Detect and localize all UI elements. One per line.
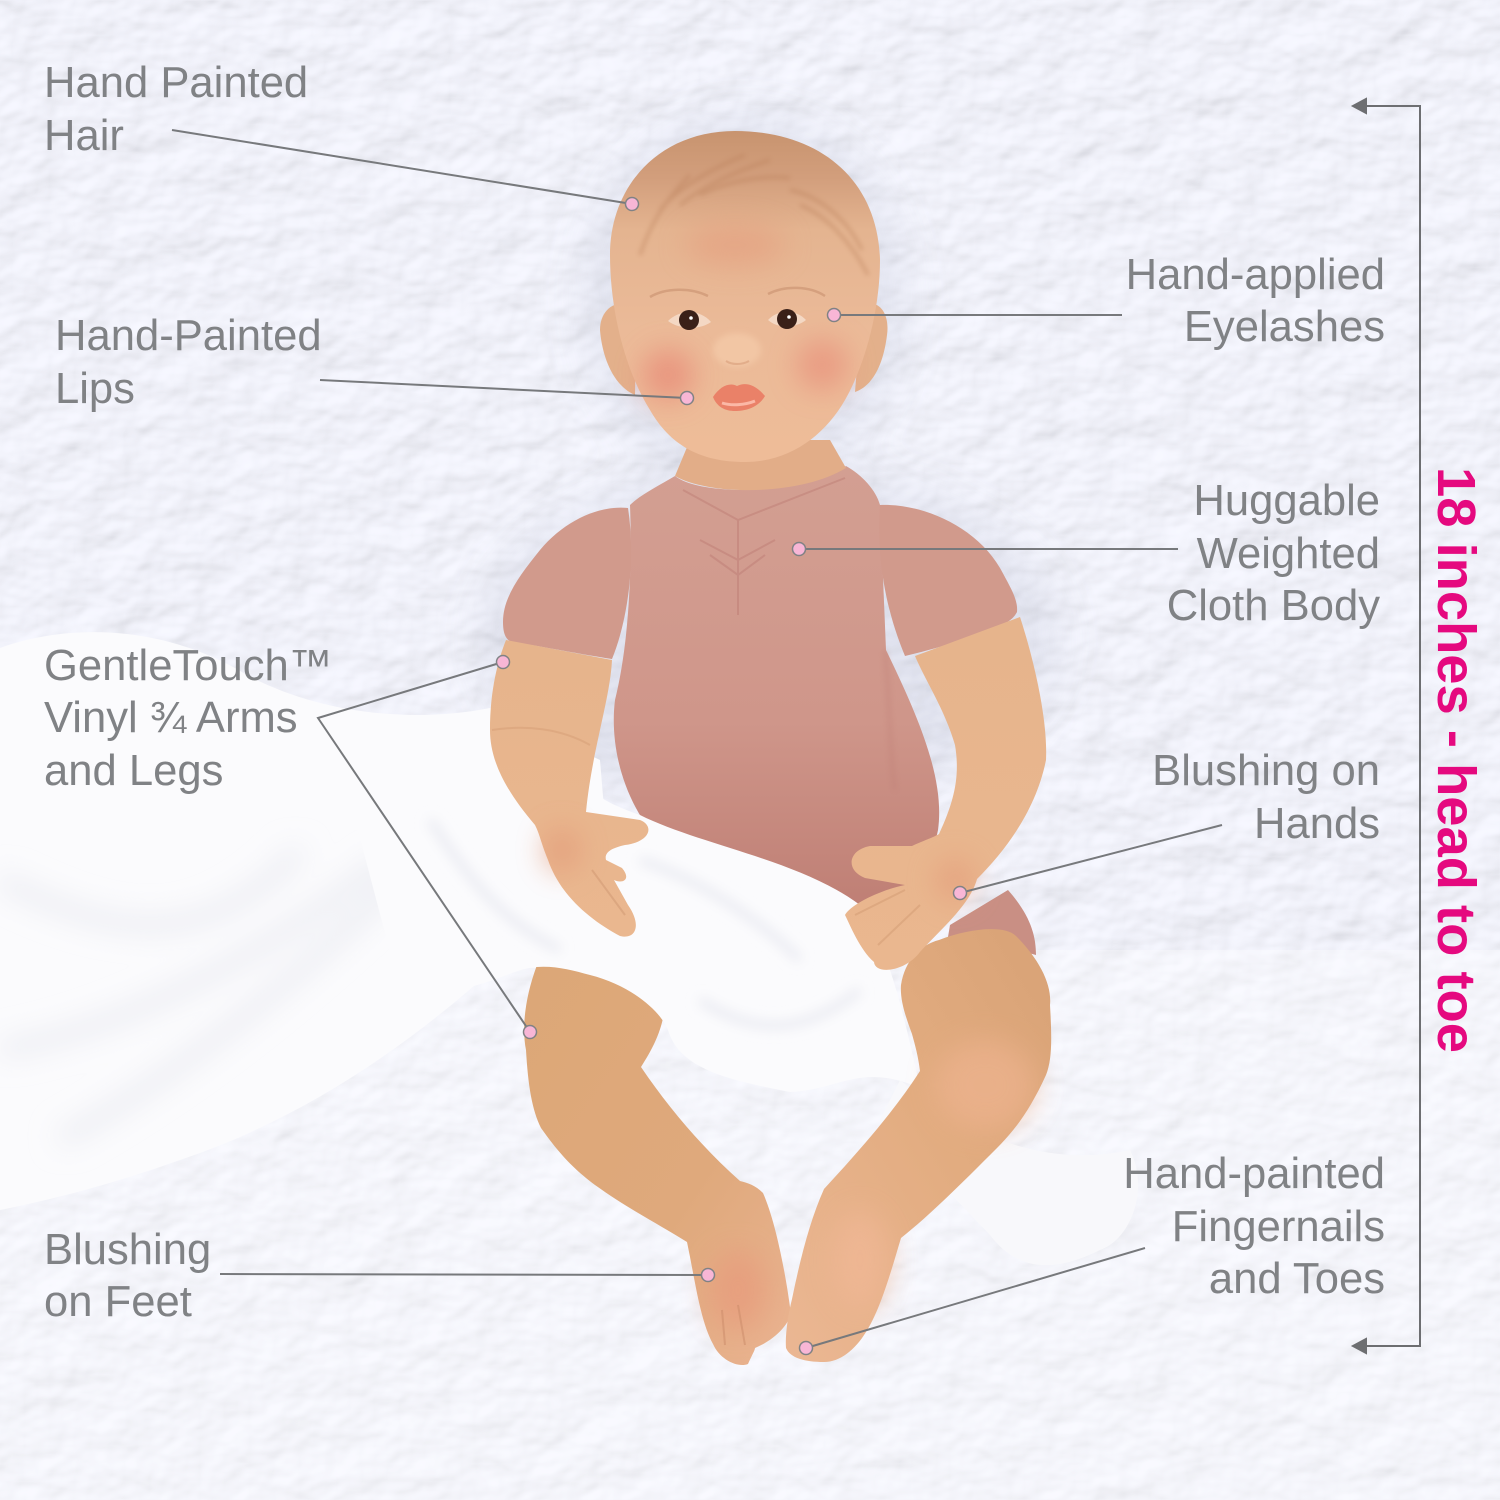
callout: gentletouch vinyl arms and legs bbox=[44, 642, 536, 1038]
callout: hand painted hair bbox=[44, 59, 638, 210]
callout: huggable weighted cloth body: Cloth Body bbox=[1167, 582, 1380, 630]
lips bbox=[713, 384, 765, 411]
hair strokes bbox=[640, 155, 868, 275]
callout: hand-painted fingernails and toes bbox=[800, 1150, 1385, 1354]
eyes bbox=[668, 309, 806, 330]
right leg bbox=[786, 929, 1051, 1362]
eyebrows bbox=[650, 288, 825, 297]
right arm and hand bbox=[845, 617, 1046, 970]
callout: hand-applied eyelashes: Hand-applied bbox=[1126, 251, 1385, 299]
callout: gentletouch vinyl arms and legs: and Legs bbox=[44, 747, 223, 795]
callout: hand-applied eyelashes: Eyelashes bbox=[1184, 303, 1385, 351]
callout: blushing on hands: Blushing on bbox=[1152, 747, 1380, 795]
callout: hand-painted lips: Hand-Painted bbox=[55, 312, 322, 360]
callout: blushing on feet bbox=[44, 1226, 714, 1326]
soft shadow around doll bbox=[480, 115, 1060, 810]
left arm and hand bbox=[490, 640, 648, 937]
white gauze blanket: left sweep and right tail bbox=[0, 632, 1138, 1265]
vertical measurement arrow bracket bbox=[1353, 99, 1420, 1353]
left sleeve bbox=[503, 508, 631, 659]
callout: hand-painted fingernails and toes: Fingernails bbox=[1172, 1203, 1385, 1251]
callout: hand painted hair: Hair bbox=[44, 112, 124, 160]
callout: blushing on feet: Blushing bbox=[44, 1226, 211, 1274]
callout: gentletouch vinyl arms and legs: Vinyl ¾ Arms bbox=[44, 694, 298, 742]
nose bbox=[713, 333, 761, 367]
blanket lap fold bbox=[350, 710, 920, 1092]
head bbox=[610, 131, 880, 462]
callout: huggable weighted cloth body: Weighted bbox=[1197, 530, 1380, 578]
callout: blushing on hands bbox=[954, 747, 1380, 900]
callout: hand painted hair: Hand Painted bbox=[44, 59, 308, 107]
callout: hand-painted lips: Lips bbox=[55, 365, 135, 413]
left ear bbox=[600, 303, 636, 395]
callout: blushing on feet: on Feet bbox=[44, 1278, 192, 1326]
pink diaper behind right leg bbox=[945, 890, 1036, 955]
cheek blush bbox=[642, 349, 694, 401]
callout: hand-painted fingernails and toes: Hand-painted bbox=[1123, 1150, 1385, 1198]
callout: huggable weighted cloth body bbox=[792, 477, 1380, 630]
callout: hand-painted lips bbox=[55, 312, 694, 413]
torso bbox=[614, 466, 939, 930]
right sleeve bbox=[879, 505, 1017, 656]
callout: hand-applied eyelashes bbox=[828, 251, 1385, 351]
right ear bbox=[855, 303, 888, 392]
left leg bbox=[524, 965, 791, 1365]
callout: huggable weighted cloth body: Huggable bbox=[1193, 477, 1380, 525]
neck bbox=[675, 440, 846, 490]
height label: 18 inches - head to toe bbox=[1426, 467, 1486, 1053]
forehead blush bbox=[685, 225, 785, 265]
callout: hand-painted fingernails and toes: and Toes bbox=[1209, 1255, 1385, 1303]
callout: gentletouch vinyl arms and legs: GentleTouch™ bbox=[44, 642, 332, 690]
callout: blushing on hands: Hands bbox=[1254, 800, 1380, 848]
